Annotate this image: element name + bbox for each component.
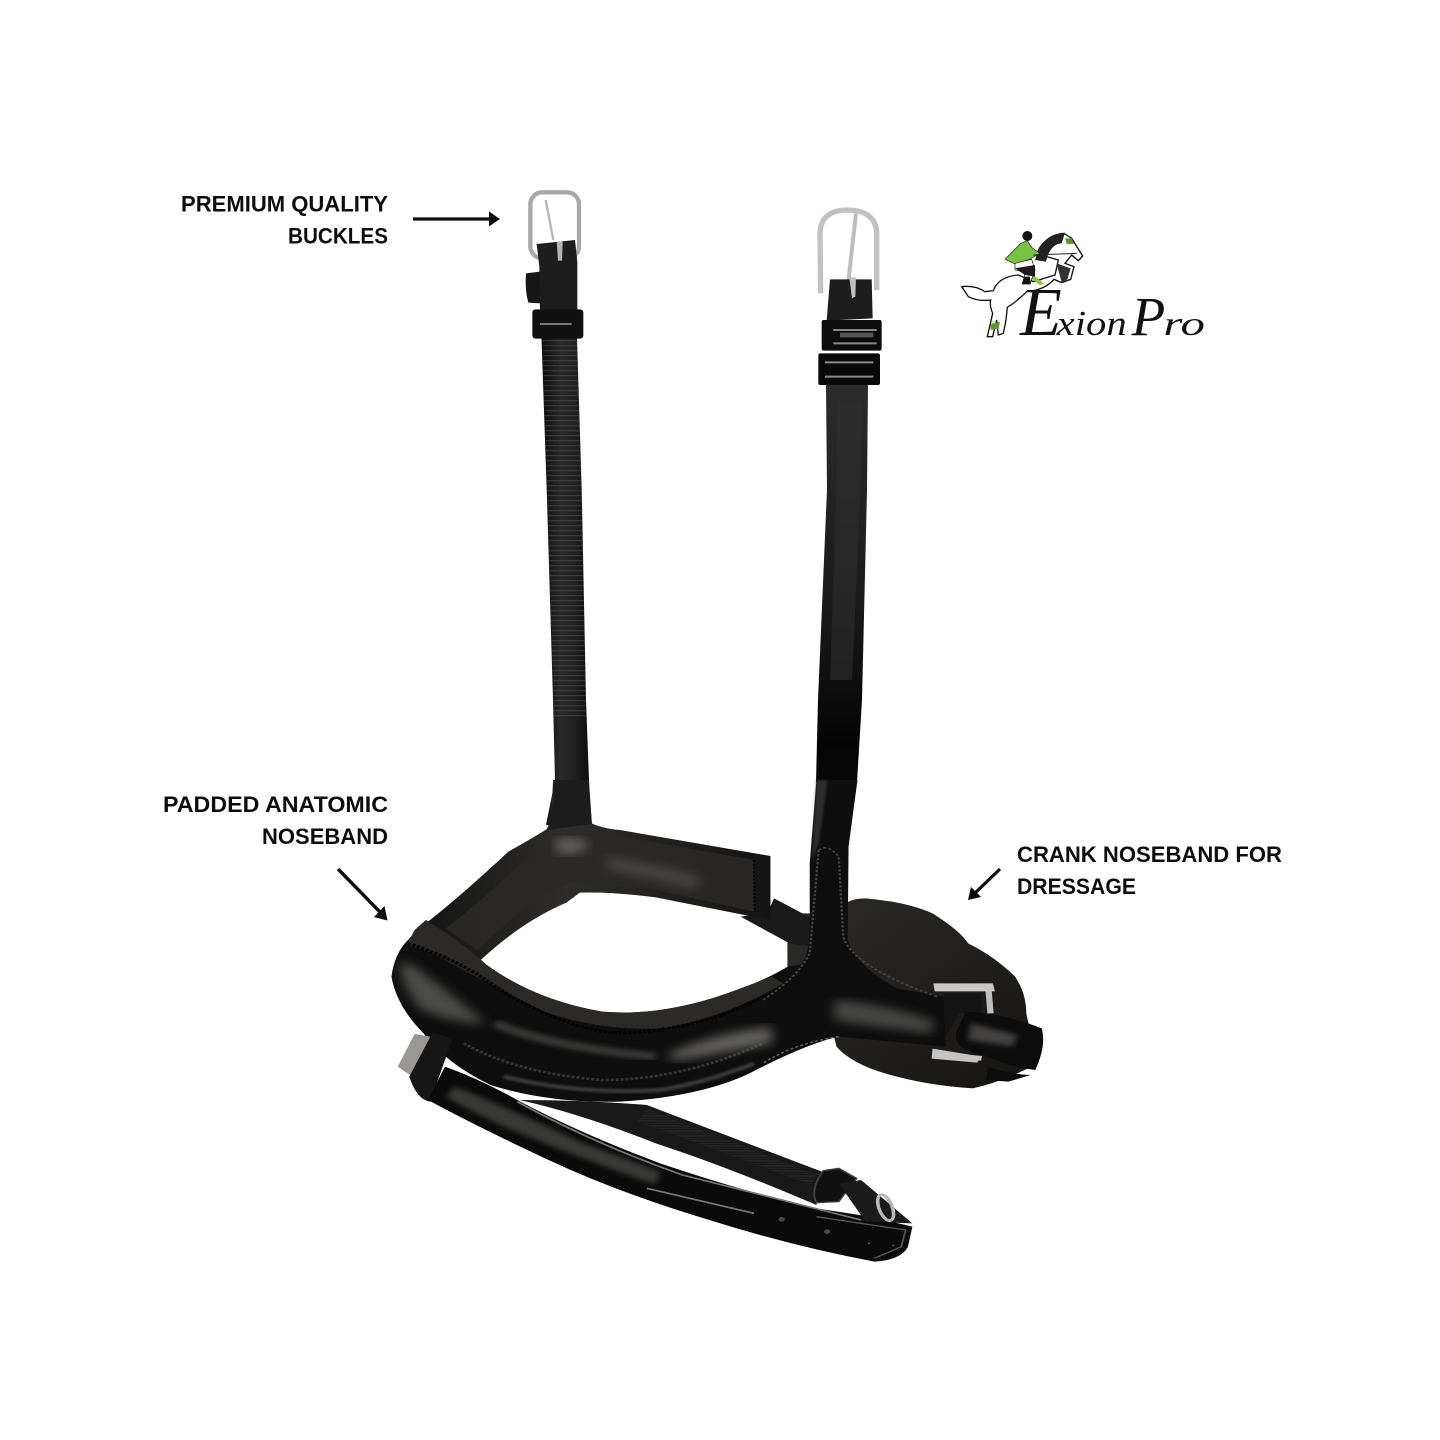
arrow: to padded noseband [338, 869, 388, 920]
left cheek strap with buckle [526, 192, 591, 825]
left buckle [526, 192, 583, 339]
right cheek strap with buckle [816, 210, 882, 782]
arrow: to crank noseband [968, 869, 1000, 900]
rider [1005, 231, 1077, 284]
T junction highlights [665, 1027, 772, 1060]
crank buckle hardware, lower [932, 1049, 982, 1063]
label: crank noseband for dressage [1017, 842, 1282, 899]
label: padded anatomic noseband: NOSEBAND [262, 824, 388, 849]
label: padded anatomic noseband: PADDED ANATOMIC [163, 792, 388, 817]
wordmark: ro [1163, 306, 1205, 343]
chin strap slot keeper [398, 1034, 430, 1077]
label: crank noseband for dressage: CRANK NOSEBAND FOR [1017, 842, 1282, 867]
logo: ExionPro [962, 231, 1205, 350]
rolled centre highlight [401, 960, 486, 1023]
label: crank noseband for dressage: DRESSAGE [1017, 874, 1136, 899]
rear of chin strap [520, 1100, 822, 1205]
padded rim [407, 920, 783, 1029]
right strap leather [816, 385, 868, 782]
strap holes [778, 1217, 895, 1246]
far side crank flap [787, 898, 1037, 1088]
right buckle [818, 210, 882, 385]
label: premium quality buckles: PREMIUM QUALITY [181, 192, 388, 216]
padded cheek piece [428, 780, 770, 960]
cheek stem [546, 780, 592, 830]
connecting back strap [741, 898, 812, 947]
front of chin strap [428, 1067, 912, 1262]
label: premium quality buckles: BUCKLES [288, 224, 388, 248]
horse [962, 233, 1083, 337]
strap keeper [814, 1168, 857, 1203]
strap end tab with ring [839, 1180, 912, 1223]
wordmark: xion [1056, 304, 1127, 343]
noseband assembly [391, 780, 1043, 1262]
wordmark: E [1019, 274, 1062, 350]
label: padded anatomic noseband [163, 792, 388, 849]
arrow: to buckle [413, 212, 500, 226]
left strap leather [542, 338, 591, 825]
main noseband body [391, 780, 946, 1102]
square buckle [933, 987, 991, 1058]
wordmark: P [1131, 286, 1165, 347]
buckle strap loop [956, 1012, 1043, 1070]
label: premium quality buckles [181, 192, 388, 248]
